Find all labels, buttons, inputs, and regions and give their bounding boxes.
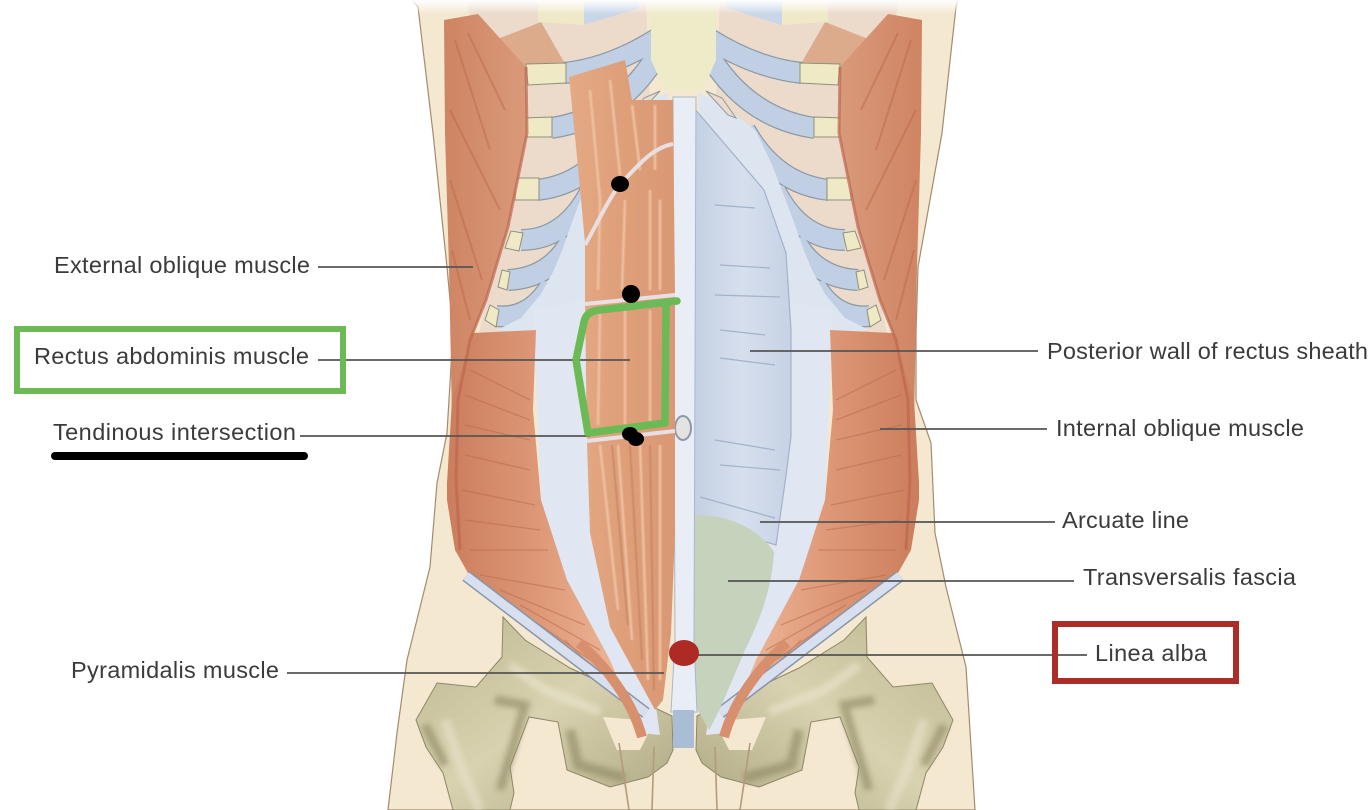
abdominal wall muscles: external and internal oblique [444,14,922,737]
red marker dot on linea alba [669,640,699,666]
rectus sheath white top fade [400,0,970,14]
umbilicus [675,416,691,440]
pelvis and femurs [416,617,953,810]
callout: linea alba: Linea alba [1095,640,1208,666]
green annotation outline on rectus segment [576,301,677,433]
callout: rectus abdominis muscle [17,329,343,391]
transversalis fascia [692,515,774,730]
label: pyramidalis muscle: Pyramidalis muscle [71,657,279,683]
rib cage and costal cartilages [466,0,900,340]
label: transversalis fascia: Transversalis fascia [1083,564,1297,590]
black marker dots on tendinous intersections [611,176,644,446]
posterior wall of rectus sheath [692,108,791,545]
label: internal oblique muscle: Internal oblique muscle [1056,415,1304,441]
label: external oblique muscle: External oblique muscle [54,252,310,278]
callout: tendinous intersection: Tendinous intersection [53,419,296,445]
callout: rectus abdominis muscle: Rectus abdominis muscle [34,343,309,369]
label: arcuate line: Arcuate line [1062,507,1189,533]
linea alba strip [671,97,697,748]
sternum [651,0,716,90]
label: posterior wall of rectus sheath: Posterior wall of rectus sheath [1047,338,1368,364]
skin silhouette [388,0,975,810]
callout: linea alba [1055,624,1236,681]
rectus abdominis muscle [569,60,675,710]
leader lines [287,267,1087,673]
tendinous intersections [585,144,675,441]
